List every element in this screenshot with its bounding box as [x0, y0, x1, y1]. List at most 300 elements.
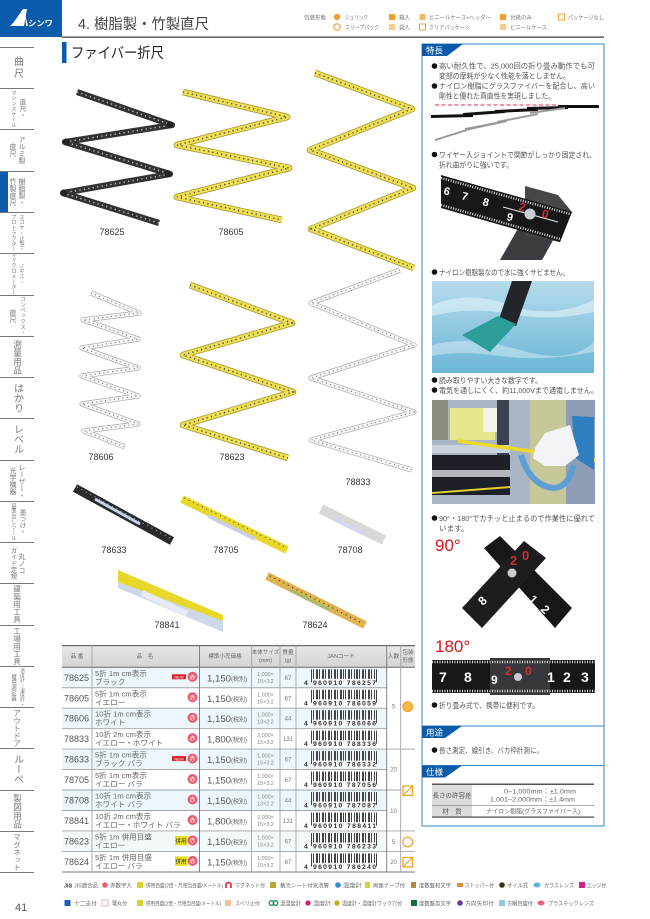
- row 78606: 44: [285, 717, 292, 723]
- row 78841: 960910 788411: [313, 823, 376, 830]
- specification table: 1,001~2,000mm：±1.4mm: [490, 796, 576, 804]
- row 78606: 78606: [64, 714, 89, 724]
- row 78705: 4: [304, 782, 308, 789]
- footer icon legend: オイル式: [507, 882, 528, 890]
- nav tab: ノギス・マイクロメーター: ノギス・: [18, 263, 24, 285]
- table header: 品 番: [71, 653, 84, 660]
- row 78841: [64, 811, 378, 830]
- footer icon legend: 十二支付: [74, 900, 97, 908]
- row 78708: [62, 790, 386, 810]
- row 78606: 13×2.2: [257, 720, 274, 726]
- tab: specifications: 仕様: [426, 767, 444, 777]
- row 78708: 13×2.2: [257, 802, 274, 808]
- footer icon legend: 度数盤和文字: [419, 882, 451, 890]
- photo: rule opened flat at 180 degrees: 3: [581, 669, 589, 685]
- footer icon legend: 温度計: [343, 882, 362, 890]
- footer icon legend: JIS適合品: [74, 882, 98, 890]
- nav tab: マグネット: マグネット: [12, 833, 22, 871]
- row 78841: 10折 2m cm表示: [95, 811, 152, 821]
- table header: 質量: [282, 648, 294, 656]
- table header: 入数: [388, 652, 399, 660]
- row 78708: 44: [285, 798, 292, 804]
- nav tab: 墨つけ・基準出しツール: 墨つけ・: [18, 509, 25, 535]
- row 78705: イエロー バラ: [95, 780, 143, 789]
- row 78625: 1,000×: [257, 672, 274, 678]
- label: 180 degrees: 180°: [435, 637, 470, 656]
- row 78633: 1,150: [207, 755, 231, 766]
- page title: 4. 樹脂製・竹製直尺: [78, 16, 209, 33]
- row 78624: 1,150: [207, 857, 231, 868]
- nav tab: 直尺・マシンスケール: マシンスケール: [10, 90, 16, 128]
- row 78624: 960910 786240: [313, 864, 376, 871]
- footer icon legend: 温湿度計: [280, 900, 301, 908]
- row 78705: 78705: [64, 775, 89, 785]
- table header: 品 名: [137, 652, 153, 660]
- row 78624: [64, 852, 378, 871]
- row 78833: 960910 788336: [313, 741, 376, 748]
- nav tab: アルミ製直尺: [0, 129, 34, 170]
- row 78624: 78624: [64, 857, 89, 867]
- packaging icons column: [403, 702, 413, 867]
- row 78606: 1,000×: [257, 713, 274, 719]
- product labels: 78605: [218, 227, 244, 237]
- nav tab: アウトドア: アウトドア: [12, 709, 22, 747]
- footer icon legend: 併用目盛(2倍・尺相当目盛/メートル): [146, 900, 221, 908]
- row 78833: [64, 729, 378, 748]
- row 78605: (税別): [231, 695, 247, 703]
- row 78633: 78633: [64, 755, 89, 765]
- header rule: [62, 36, 604, 38]
- nav tab: active 樹脂製・竹製直尺: 樹脂製・: [18, 178, 25, 206]
- nav tab: 温度計・湿度計・環境測定器: 環境測定器: [10, 674, 16, 700]
- packaging legend: ビニールケース+ヘッダー: [429, 14, 491, 22]
- product: 78624 folded tan rule: [267, 576, 365, 625]
- footer icon legend: 併用目盛(2倍・尺相当目盛/メートル): [146, 882, 223, 890]
- feature text: durability and rigidity: 剛性と優れた真直性を実現しました。: [439, 90, 555, 100]
- photo: use on electrical panel: [432, 400, 595, 504]
- quantity column: 20: [390, 860, 397, 866]
- row 78625: 赤: [189, 674, 196, 681]
- packaging legend: 包装形態: [304, 14, 326, 22]
- quantity column: 20: [390, 768, 397, 774]
- table header: 包装: [402, 648, 414, 656]
- photo: rule opened flat at 180 degrees: 2: [505, 664, 512, 678]
- nav tab: 直尺・マシンスケール: [0, 88, 34, 129]
- row 78708: 10折 1m cm表示: [95, 790, 152, 800]
- photo: rule folded at 90 degrees: 2: [538, 602, 553, 617]
- nav tab: 直尺・マシンスケール: 直尺・: [18, 99, 25, 119]
- section heading: fiber folding rule: ファイバー折尺: [71, 45, 164, 62]
- feature text: durability and rigidity: 変部の摩耗が少なく性能を落としません。: [439, 70, 570, 80]
- product: 78841 yellow rule in clear case: [118, 570, 223, 632]
- row 78625: 960910 786257: [313, 680, 376, 687]
- feature text: click stops: います。: [439, 524, 469, 533]
- row 78623: (税別): [231, 838, 247, 846]
- feature text: wire joint: 折れ曲がりに強いです。: [439, 160, 513, 170]
- specification table: 材 質: [442, 806, 462, 816]
- footer icon legend: エッジ付: [587, 882, 606, 890]
- quantity column: [390, 704, 397, 866]
- row 78606: (税別): [231, 716, 247, 724]
- row 78633: 1,000×: [257, 754, 274, 760]
- product labels: 78705: [213, 545, 239, 555]
- nav tab: ルーペ: ルーペ: [12, 754, 22, 784]
- feature text: click stops: 90°・180°でカチッと止まるので作業性に優れて: [439, 513, 595, 523]
- label: 90 degrees: 90°: [435, 536, 461, 555]
- row 78605: イエロー: [95, 698, 125, 707]
- row 78623: 78623: [64, 836, 89, 846]
- row 78633: 15×3.2: [257, 761, 274, 767]
- row 78633: NEW: [174, 756, 184, 761]
- row 78623: 15×3.2: [257, 842, 274, 848]
- product: 78606 white rule: [82, 293, 139, 447]
- photo: joint close-up: 2: [517, 199, 528, 215]
- photo: rule folded at 90 degrees: 2: [510, 553, 517, 568]
- row 78708: 78708: [64, 796, 89, 806]
- row 78841: 1,800: [207, 816, 231, 828]
- packaging legend: スリーブパック: [345, 24, 379, 32]
- row 78624: 5折 1m 併用目盛: [95, 852, 152, 862]
- row 78705: 1,150: [207, 776, 231, 787]
- row 78633: 4: [304, 762, 308, 769]
- row 78633: ブラック バラ: [95, 758, 143, 768]
- photo: rule folded at 90 degrees: [462, 536, 572, 628]
- nav tab: 墨つけ・基準出しツール: 基準出しツール: [10, 503, 16, 541]
- row 78624: 67: [285, 860, 292, 866]
- nav tab: active 樹脂製・竹製直尺: [0, 171, 34, 212]
- packaging legend: [304, 14, 604, 32]
- row 78708: 4: [304, 802, 308, 810]
- table header: 標準小売価格: [208, 652, 242, 660]
- row 78605: 67: [285, 696, 292, 702]
- feature text: durability and rigidity: 高い耐久性で、25,000回の折り畳み動作でも可: [439, 60, 595, 70]
- nav tab: ノギス・マイクロメーター: [0, 253, 34, 294]
- nav tab: 曲尺: 曲尺: [12, 56, 22, 80]
- row 78605: 4: [304, 700, 308, 707]
- row 78625: 67: [285, 676, 292, 682]
- row 78705: 赤: [189, 777, 196, 784]
- row 78606: 赤: [189, 715, 196, 722]
- nav tab: レーザー・光学機器: [0, 460, 34, 501]
- photo: rule folded at 90 degrees: 0: [522, 548, 529, 563]
- feature text: durability and rigidity: [432, 60, 595, 100]
- row 78606: 1,150: [207, 714, 231, 725]
- row 78623: 1,150: [207, 837, 231, 848]
- row 78625: 4: [304, 680, 308, 687]
- footer icon legend: ガラスレンズ: [544, 882, 574, 890]
- product labels: 78624: [302, 620, 328, 630]
- table header: (g): [285, 658, 292, 664]
- footer icon legend: 湿度計: [313, 900, 331, 908]
- photo: joint close-up: 8: [481, 196, 490, 209]
- row 78606: 4: [304, 721, 308, 728]
- nav tab: 墨つけ・基準出しツール: [0, 501, 34, 542]
- table header: JANコード: [327, 653, 355, 660]
- row 78625: ブラック: [95, 676, 125, 686]
- nav tab: ノギス・マイクロメーター: マイクロメーター: [10, 252, 16, 296]
- row 78708: (税別): [231, 798, 247, 806]
- row 78633: 67: [285, 758, 292, 764]
- row 78833: 131: [283, 737, 294, 743]
- footer icon legend: 方眼目盛付: [507, 900, 533, 908]
- row 78841: 131: [283, 819, 294, 825]
- nav tab: 温度計・湿度計・環境測定器: [0, 666, 34, 707]
- nav tab: はかり: [0, 377, 34, 418]
- photo: rule opened flat at 180 degrees: 7: [439, 669, 447, 685]
- feature text: water resistance: ナイロン樹脂製なので水に強くサビません。: [439, 267, 569, 277]
- row 78833: 10折 2m cm表示: [95, 729, 152, 739]
- product labels: 78708: [337, 545, 363, 555]
- row 78624: 4: [304, 864, 308, 871]
- product: 78833 white rule: [311, 270, 414, 470]
- footer icon legend: 両面テープ付: [373, 882, 405, 890]
- row 78833: 1,800: [207, 735, 231, 746]
- footer icon legend: 電丸付: [112, 900, 127, 908]
- row 78841: イエロー・ホワイト バラ: [95, 820, 181, 830]
- row 78708: 1,150: [207, 796, 231, 807]
- nav tab: 測量用品: [0, 336, 34, 377]
- row 78841: 赤: [189, 818, 196, 824]
- feature text: legibility and insulation: 読み取りやすい大きな数字です。: [439, 375, 542, 385]
- row 78833: 15×3.2: [257, 740, 274, 746]
- nav tab: 工場用工具: [0, 625, 34, 666]
- nav tab: スコヤ・止型・プロトラクター: [0, 212, 34, 253]
- quantity column: 10: [390, 809, 397, 815]
- row 78605: 960910 786059: [313, 700, 376, 707]
- packaging legend: 台紙のみ: [510, 14, 532, 22]
- row 78605: 15×3.2: [257, 699, 274, 705]
- nav tab: 建築用工具: [0, 583, 34, 624]
- product: 78705 folded yellow rule: [182, 498, 287, 550]
- row 78605: 1,150: [207, 694, 231, 705]
- row 78623: 67: [285, 839, 292, 845]
- row 78623: 960910 786233: [313, 843, 376, 850]
- photo: rule opened flat at 180 degrees: 0: [525, 664, 532, 678]
- photo: rule opened flat at 180 degrees: [432, 658, 595, 695]
- row 78623: 併用: [175, 837, 187, 845]
- feature text: click stops: [432, 513, 595, 533]
- row 78606: ホワイト: [95, 718, 125, 727]
- product labels: 78833: [345, 477, 371, 487]
- packaging legend: パッケージなし: [568, 14, 604, 22]
- footer icon legend: [64, 882, 606, 908]
- feature text: legibility and insulation: [432, 375, 598, 395]
- footer icon legend: 温度計・湿度計フック穴付: [342, 900, 402, 908]
- table header: 本体サイズ: [252, 648, 280, 656]
- row 78841: (税別): [231, 818, 247, 826]
- feature text: wire joint: ワイヤー入ジョイントで関節がしっかり固定され、: [439, 150, 596, 160]
- row 78708: 赤: [189, 797, 196, 804]
- row 78633: (税別): [231, 757, 247, 765]
- specification table: ナイロン樹脂(グラスファイバー入): [486, 808, 580, 816]
- table header: [62, 645, 415, 667]
- nav tab: 温度計・湿度計・環境測定器: 温度計・湿度計・: [19, 668, 24, 706]
- photo: rule in water: [432, 281, 594, 373]
- panel: features, uses and specs: [422, 44, 604, 826]
- photo: rule opened flat at 180 degrees: 1: [547, 669, 555, 685]
- row 78708: 1,000×: [257, 794, 274, 800]
- row 78625: NEW: [174, 674, 184, 679]
- nav tab: アルミ製直尺: 直尺: [9, 143, 16, 157]
- footer icon legend: JIS: [64, 884, 73, 890]
- product labels: 78606: [88, 452, 114, 462]
- footer icon legend: プラスチックレンズ: [548, 900, 594, 908]
- row 78623: 5折 1m 併用目盛: [95, 831, 152, 841]
- row 78606: 960910 786066: [313, 721, 376, 728]
- row 78624: 1,000×: [257, 856, 274, 862]
- nav tab: アルミ製直尺: アルミ製: [18, 136, 25, 164]
- row 78705: 960910 787056: [313, 782, 376, 789]
- side navigation: [0, 47, 34, 873]
- photo: rule opened flat at 180 degrees: 8: [464, 669, 472, 685]
- product labels: 78623: [219, 452, 245, 462]
- row 78625: (税別): [231, 675, 247, 683]
- nav tab: ルーペ: [0, 748, 34, 789]
- nav tab: コンベックス・直尺: 直尺: [9, 309, 16, 323]
- nav tab: はかり: はかり: [12, 383, 22, 413]
- photo: joint close-up: 6: [442, 185, 451, 198]
- row 78833: 2,000×: [257, 733, 274, 739]
- tab: specifications: [422, 766, 462, 778]
- row 78624: 併用: [175, 857, 187, 865]
- row 78605: 5折 1m cm表示: [95, 688, 147, 698]
- section heading: fiber folding rule: [62, 42, 164, 63]
- table grid lines: [62, 645, 415, 872]
- nav tab: 製図用品: [0, 790, 34, 831]
- row 78625: [62, 667, 386, 688]
- header: logo block: [0, 0, 62, 37]
- row 78705: [64, 770, 378, 789]
- packaging legend: クリアパッケージ: [429, 24, 470, 32]
- footer icon legend: ストッパー付: [465, 882, 494, 890]
- uses text: 長さ測定、線引き、バカ枠計測に。: [439, 745, 543, 755]
- footer icon legend: スベリ止付: [235, 900, 260, 908]
- nav tab: スコヤ・止型・プロトラクター: プロトラクター: [10, 214, 16, 252]
- tab: features: 特長: [426, 46, 444, 56]
- row 78833: 4: [304, 741, 308, 748]
- row 78633: 960910 786332: [313, 762, 376, 769]
- product: 78625 black rule: [60, 92, 174, 223]
- tab: features: [422, 44, 463, 56]
- row 78833: 赤: [189, 736, 196, 743]
- nav tab: レーザー・光学機器: 光学機器: [9, 467, 16, 495]
- feature text: durability and rigidity: ナイロン樹脂にグラスファイバーを配合し、高い: [439, 80, 595, 90]
- photo: joint close-up: 7: [460, 190, 469, 203]
- row 78605: [64, 688, 378, 707]
- nav tab: 丸ノコガイド定規: [0, 542, 34, 583]
- row 78841: 15×3.2: [257, 822, 274, 828]
- product labels: 78625: [99, 227, 125, 237]
- row 78623: 4: [304, 843, 308, 850]
- table header: 形態: [402, 656, 414, 664]
- feature text: portable: 折り畳み式で、携帯に便利です。: [439, 700, 539, 710]
- row 78625: 78625: [64, 673, 89, 683]
- nav tab: active 樹脂製・竹製直尺: 竹製直尺: [9, 178, 16, 206]
- row 78623: 赤: [189, 838, 196, 845]
- nav tab: 建築用工具: 建築用工具: [12, 585, 22, 623]
- packaging legend: ビニールケース: [510, 24, 547, 32]
- row 78624: 15×3.2: [257, 863, 274, 869]
- photo: rule folded at 90 degrees: 8: [475, 593, 490, 608]
- quantity column: 5: [392, 840, 396, 846]
- product: tall yellow rule: [310, 73, 414, 268]
- row 78841: 4: [304, 823, 308, 830]
- row 78833: (税別): [231, 736, 247, 744]
- tab: uses: [422, 726, 462, 738]
- row 78623: [62, 831, 386, 851]
- row 78841: 2,000×: [257, 815, 274, 821]
- row 78624: (税別): [231, 859, 247, 867]
- diagram: straightness comparison: [431, 105, 599, 141]
- photo: rule opened flat at 180 degrees: 9: [491, 673, 498, 687]
- tab: uses: 用途: [426, 728, 444, 738]
- row 78705: 15×3.2: [257, 781, 274, 787]
- row 78605: 1,000×: [257, 692, 274, 698]
- photo: joint close-up: 9: [505, 211, 514, 224]
- quantity column: 5: [392, 704, 396, 710]
- nav tab: コンベックス・直尺: コンベックス・: [19, 296, 25, 336]
- nav tab: 丸ノコガイド定規: ガイド定規: [9, 547, 16, 579]
- table header: (mm): [259, 658, 272, 664]
- nav tab: コンベックス・直尺: [0, 295, 34, 336]
- row 78623: 1,000×: [257, 835, 274, 841]
- nav tab: スコヤ・止型・プロトラクター: スコヤ・止型・: [18, 214, 24, 252]
- row 78625: 1,150: [207, 673, 231, 684]
- packaging legend: 箱入: [399, 14, 410, 22]
- nav tab: レーザー・光学機器: レーザー・: [18, 464, 25, 498]
- product: 78623 yellow dual scale rule: [183, 285, 293, 458]
- row 78624: イエロー バラ: [95, 861, 143, 870]
- nav tab: レベル: [0, 418, 34, 459]
- row 78605: 78605: [64, 693, 89, 703]
- nav tab: 工場用工具: 工場用工具: [12, 627, 22, 665]
- photo: joint close-up: 0: [540, 206, 551, 222]
- photo: joint close-up: [441, 175, 572, 260]
- photo: rule opened flat at 180 degrees: 2: [563, 669, 571, 685]
- footer icon legend: 度数盤英文字: [419, 900, 451, 908]
- product: 78605 yellow rule: [177, 92, 289, 220]
- row 78633: 赤: [189, 756, 196, 763]
- row 78833: 78833: [64, 734, 89, 744]
- row 78623: イエロー: [95, 841, 125, 850]
- product labels: 78633: [101, 545, 127, 555]
- product: 78633 folded black rule: [75, 487, 172, 541]
- row 78633: [62, 749, 386, 770]
- row 78605: 赤: [189, 695, 196, 702]
- footer icon legend: 蓄光シート付気泡管: [280, 882, 329, 890]
- nav tab: レベル: レベル: [12, 424, 22, 454]
- product labels: 78841: [154, 620, 180, 630]
- row 78841: 78841: [64, 816, 89, 826]
- row 78633: 5折 1m cm表示: [95, 750, 147, 760]
- page number: 41: [15, 902, 27, 914]
- row 78606: [62, 708, 386, 729]
- footer icon legend: 赤数字入: [110, 882, 132, 890]
- row 78624: 赤: [189, 858, 196, 865]
- nav tab: 測量用品: 測量用品: [12, 340, 22, 374]
- row 78833: イエロー・ホワイト: [95, 739, 163, 748]
- nav tab: マグネット: [0, 831, 34, 873]
- footer icon legend: マグネット付: [235, 882, 265, 890]
- row 78708: 960910 787087: [313, 802, 376, 810]
- specification table: 長さの許容差: [432, 790, 472, 800]
- header: logo block: シンワ: [28, 19, 53, 28]
- product: 78708 folded white rule: [321, 509, 384, 540]
- row 78625: 5折 1m cm表示: [95, 668, 147, 678]
- nav tab: 製図用品: 製図用品: [12, 794, 22, 828]
- row 78625: 15×3.2: [257, 679, 274, 685]
- product labels: [88, 227, 371, 630]
